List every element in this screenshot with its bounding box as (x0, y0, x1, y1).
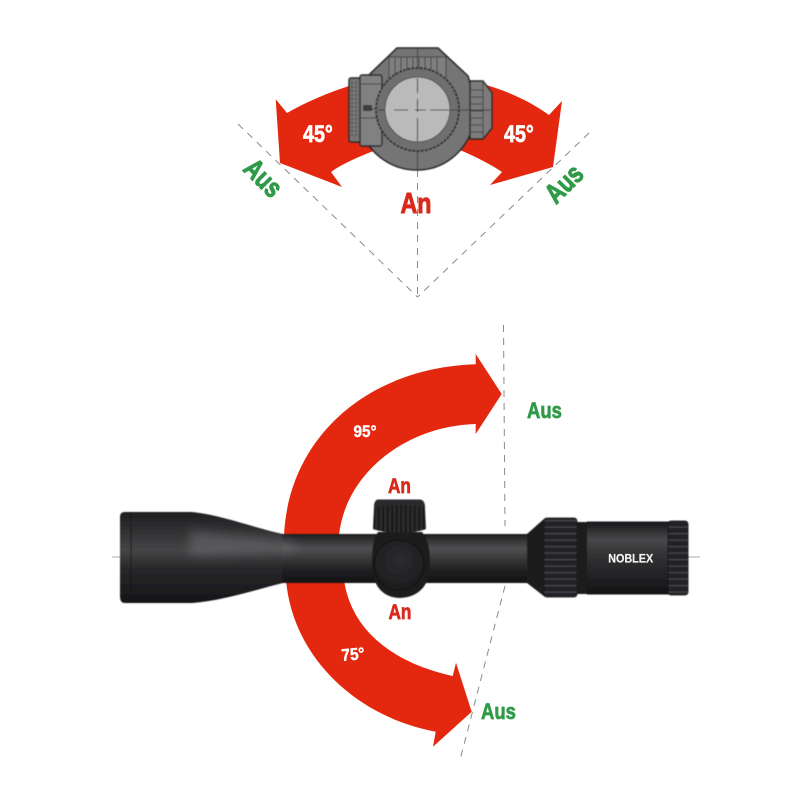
top diagram: dashed guide lines (238, 124, 589, 297)
top turret knob (373, 500, 426, 533)
label: 95 degrees: 95° (354, 422, 377, 441)
label: left 45 degrees: 45° (303, 120, 333, 147)
ring collar (577, 522, 587, 594)
eyepiece shoulder (527, 518, 545, 597)
objective rim line (130, 514, 132, 601)
lens (385, 77, 450, 142)
arrow: upper 95 degrees (284, 354, 502, 536)
arrow: right 45 degrees (460, 85, 562, 185)
label: upper An: An (388, 476, 411, 498)
icon: front view of scope (349, 48, 492, 170)
top turret cap (374, 500, 425, 508)
top turret ridges (389, 57, 446, 78)
label: top An: An (400, 186, 431, 220)
main tube (282, 534, 528, 583)
turret base (372, 532, 430, 598)
label: right 45 degrees: 45° (504, 120, 534, 147)
label: upper Aus: Aus (527, 400, 562, 423)
right turret (470, 81, 492, 139)
objective ring (376, 68, 459, 151)
brand name: NOBLEX (608, 552, 653, 566)
arrow: lower 75 degrees (286, 580, 472, 747)
label: top left Aus: Aus (237, 153, 289, 204)
bottom diagram: dashed guide lines (460, 325, 505, 760)
bell highlight (190, 530, 295, 556)
crosshair (394, 78, 450, 142)
rifle scope (120, 500, 688, 603)
left turret (349, 75, 382, 146)
label: top right Aus: Aus (539, 158, 590, 210)
eyepiece end ring (668, 521, 688, 595)
label: lower An: An (388, 602, 411, 624)
magnification ring (544, 518, 577, 597)
label: 75 degrees: 75° (341, 644, 365, 665)
arrow: left 45 degrees (276, 85, 376, 187)
eyepiece body (587, 522, 669, 594)
sight body (363, 48, 472, 170)
front dial (374, 540, 424, 590)
scope axis ticks (112, 556, 700, 558)
objective bell (120, 512, 283, 603)
label: lower Aus: Aus (481, 701, 516, 724)
